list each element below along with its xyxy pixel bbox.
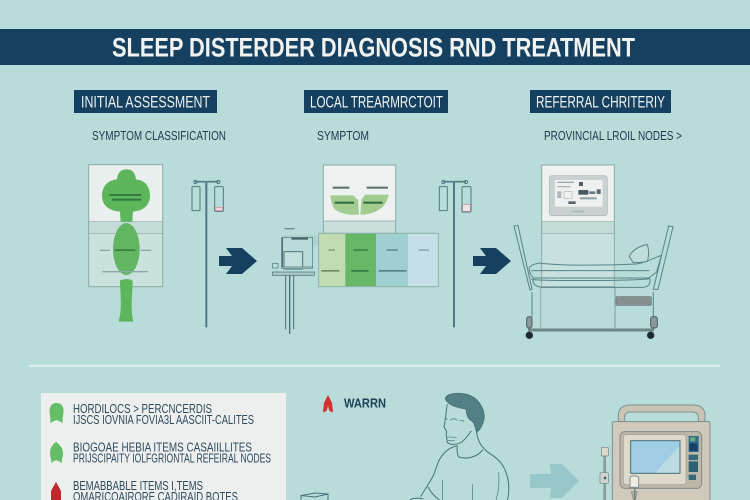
text: item 2 xyxy=(73,440,271,466)
icon: computer desk xyxy=(272,235,318,334)
subheading: symptom classification: SYMPTOM CLASSIFICATION xyxy=(92,128,226,143)
icon: green head shape xyxy=(102,169,150,222)
icon: medical device xyxy=(600,405,710,500)
icon: green leaf left xyxy=(330,195,359,215)
text: item 2: BIOGOAE HEBIA ITEMS CASAIILLITES xyxy=(73,440,252,454)
icon: green marker 1 xyxy=(50,403,64,423)
icon: red marker 3 xyxy=(51,482,61,500)
heading: local treatment xyxy=(304,90,448,113)
side probe xyxy=(600,447,608,500)
heading: referral criteria: REFERRAL CHRITERIY xyxy=(536,94,665,112)
subheading: symptom: SYMPTOM xyxy=(317,128,369,143)
heading: local treatment: LOCAL TREARMRCTOIT xyxy=(310,94,443,112)
text: item 1 xyxy=(73,401,254,427)
arrow 1 xyxy=(219,248,257,274)
icon: green torso shape xyxy=(113,223,140,275)
text: item 3: BEMABBABLE ITEMS I,TEMS xyxy=(73,478,203,493)
heading: referral criteria xyxy=(530,90,671,113)
icon: green leg shape xyxy=(119,279,133,322)
subheading: provincial nodes: PROVINCIAL LROIL NODES > xyxy=(544,128,682,143)
icon: red warning marker xyxy=(323,395,333,412)
illustration: seated man xyxy=(410,393,509,500)
icon: IV pole 1 xyxy=(192,180,223,327)
warning label xyxy=(323,395,386,412)
arrow: pale teal xyxy=(530,464,579,498)
title banner: SLEEP DISTERDER DIAGNOSIS RND TREATMENT xyxy=(112,32,635,62)
icon: green leaf right xyxy=(360,195,389,215)
heading: initial assessment: INITIAL ASSESSMENT xyxy=(81,94,210,112)
connector cable xyxy=(630,476,639,500)
panel: local treatment chart xyxy=(272,165,438,334)
hair xyxy=(445,393,484,432)
text: item 2: PRIJSCIPAITY IOLFGRIONTAL REFEIRAL NODES xyxy=(73,450,271,466)
heading: initial assessment xyxy=(74,90,217,113)
panel: legend list xyxy=(41,393,286,500)
section divider xyxy=(29,364,720,367)
monitor xyxy=(549,176,607,216)
text: item 3 xyxy=(73,478,238,500)
colour table xyxy=(319,233,438,287)
warning label: WARRN xyxy=(344,396,386,410)
arrow 2 xyxy=(473,248,511,274)
panel: symptom classification body chart xyxy=(89,165,163,322)
text: item 1: IJSCS IOVNIA FOVIA3L AASCIIT-CALITES xyxy=(73,412,254,427)
control buttons xyxy=(689,436,699,480)
screen xyxy=(631,441,680,473)
icon: green marker 2 xyxy=(50,442,63,463)
text: item 1: HORDILOCS > PERCNCERDIS xyxy=(73,401,212,416)
icon: small box xyxy=(301,493,328,500)
panel: referral criteria monitor and bed xyxy=(514,165,673,339)
icon: IV pole 2 xyxy=(439,180,471,327)
hospital bed xyxy=(514,225,673,339)
